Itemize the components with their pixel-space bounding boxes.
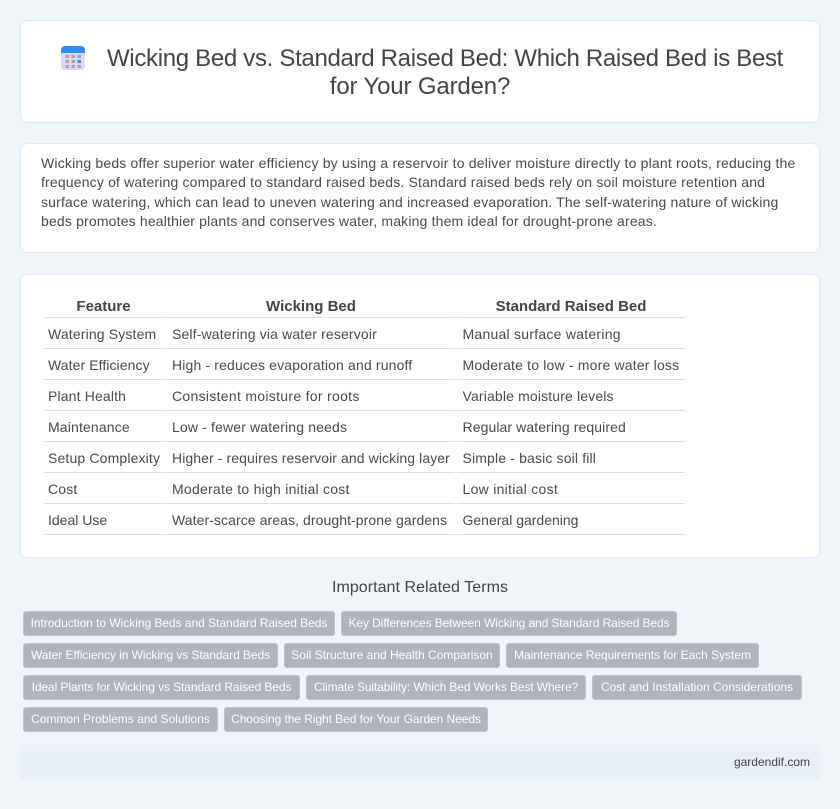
comparison table: Low initial cost [462, 481, 558, 497]
comparison table: Plant Health [48, 388, 126, 404]
summary text: beds promotes healthier plants and conserves water, making them ideal for drought-prone areas. [41, 213, 657, 229]
comparison table: Watering System [48, 326, 156, 342]
summary text [41, 155, 795, 229]
comparison table: Manual surface watering [462, 326, 621, 342]
comparison table: Setup Complexity [48, 450, 160, 466]
heading: related terms: Important Related Terms [332, 579, 508, 596]
comparison table: Low - fewer watering needs [172, 419, 347, 435]
summary text: surface watering, which can lead to uneven watering and increased evaporation. The self-watering nature of wicking [41, 194, 778, 210]
related terms tags: Water Efficiency in Wicking vs Standard Beds [31, 648, 270, 662]
title [107, 45, 784, 100]
comparison table: Water-scarce areas, drought-prone gardens [172, 512, 447, 528]
comparison table: Simple - basic soil fill [462, 450, 596, 466]
footer bar [20, 745, 820, 779]
related terms tags [23, 611, 802, 732]
comparison table: Self-watering via water reservoir [172, 326, 377, 342]
icon: calendar [61, 46, 85, 70]
footer bar: gardendif.com [734, 755, 810, 769]
comparison table: Ideal Use [48, 512, 107, 528]
comparison table: Cost [48, 481, 77, 497]
related terms tags: Climate Suitability: Which Bed Works Best Where? [314, 680, 578, 694]
title: Wicking Bed vs. Standard Raised Bed: Which Raised Bed is Best [107, 45, 783, 72]
title: for Your Garden? [330, 73, 510, 100]
comparison table: General gardening [462, 512, 578, 528]
related terms tags: Common Problems and Solutions [31, 712, 210, 726]
related terms tags: Introduction to Wicking Beds and Standard Raised Beds [31, 616, 327, 630]
comparison table: Standard Raised Bed [496, 298, 646, 315]
comparison table: Consistent moisture for roots [172, 388, 360, 404]
comparison table: Water Efficiency [48, 357, 150, 373]
comparison table: Moderate to high initial cost [172, 481, 350, 497]
comparison table: Wicking Bed [266, 298, 356, 315]
panel: title card [20, 20, 820, 123]
related terms tags: Choosing the Right Bed for Your Garden Needs [231, 712, 481, 726]
comparison table: Maintenance [48, 419, 130, 435]
panel: summary card [20, 143, 820, 253]
comparison table: Feature [76, 298, 131, 315]
summary text: Wicking beds offer superior water efficiency by using a reservoir to deliver moisture directly to plant roots, reducing the [41, 155, 795, 171]
related terms tags: Soil Structure and Health Comparison [291, 648, 493, 662]
related terms tags: Ideal Plants for Wicking vs Standard Raised Beds [32, 680, 291, 694]
comparison table: Moderate to low - more water loss [462, 357, 679, 373]
related terms tags: Maintenance Requirements for Each System [514, 648, 751, 662]
comparison table: Higher - requires reservoir and wicking layer [172, 450, 450, 466]
comparison table [44, 298, 685, 535]
related terms tags: Cost and Installation Considerations [601, 680, 793, 694]
summary text: frequency of watering compared to standard raised beds. Standard raised beds rely on soil moisture retention and [41, 174, 765, 190]
related terms tags: Key Differences Between Wicking and Standard Raised Beds [348, 616, 670, 630]
comparison table: High - reduces evaporation and runoff [172, 357, 412, 373]
comparison table: Variable moisture levels [462, 388, 614, 404]
panel: comparison table card [20, 274, 820, 558]
comparison table: Regular watering required [462, 419, 626, 435]
